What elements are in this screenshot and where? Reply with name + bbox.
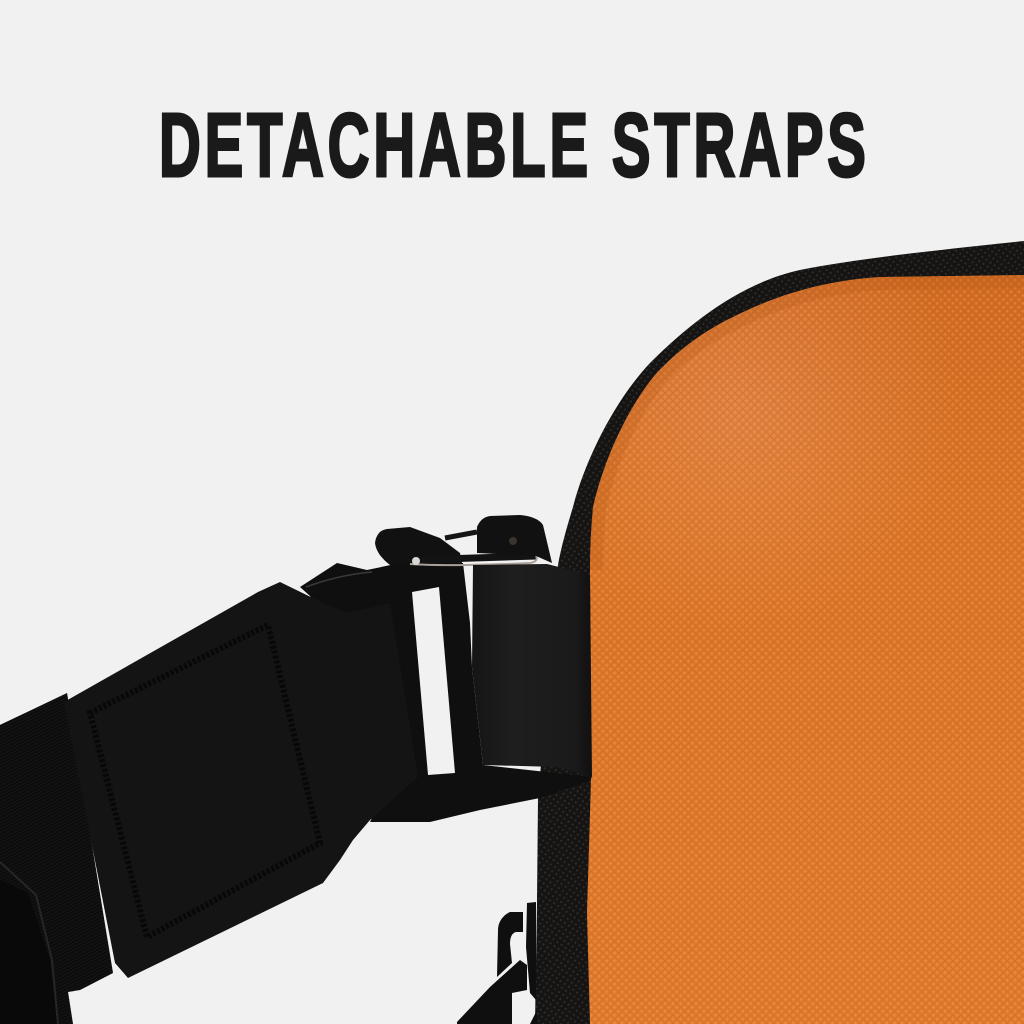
strap loop on case bbox=[472, 564, 592, 777]
zipper pull bbox=[457, 902, 537, 1024]
buckle right cap bbox=[477, 515, 552, 563]
title: DETACHABLE STRAPS bbox=[159, 96, 870, 196]
strap webbing bbox=[0, 693, 113, 1024]
ring connector bbox=[410, 532, 537, 565]
strap leather tab bbox=[64, 582, 418, 978]
buckle bbox=[300, 563, 592, 822]
product illustration: orange case with detachable strap bbox=[0, 241, 1024, 1024]
case zipper edge bbox=[535, 241, 1024, 1024]
buckle highlight bbox=[306, 572, 372, 587]
case orange shell bbox=[587, 275, 1024, 1024]
buckle left cap bbox=[375, 527, 462, 566]
stitching bbox=[90, 625, 320, 937]
